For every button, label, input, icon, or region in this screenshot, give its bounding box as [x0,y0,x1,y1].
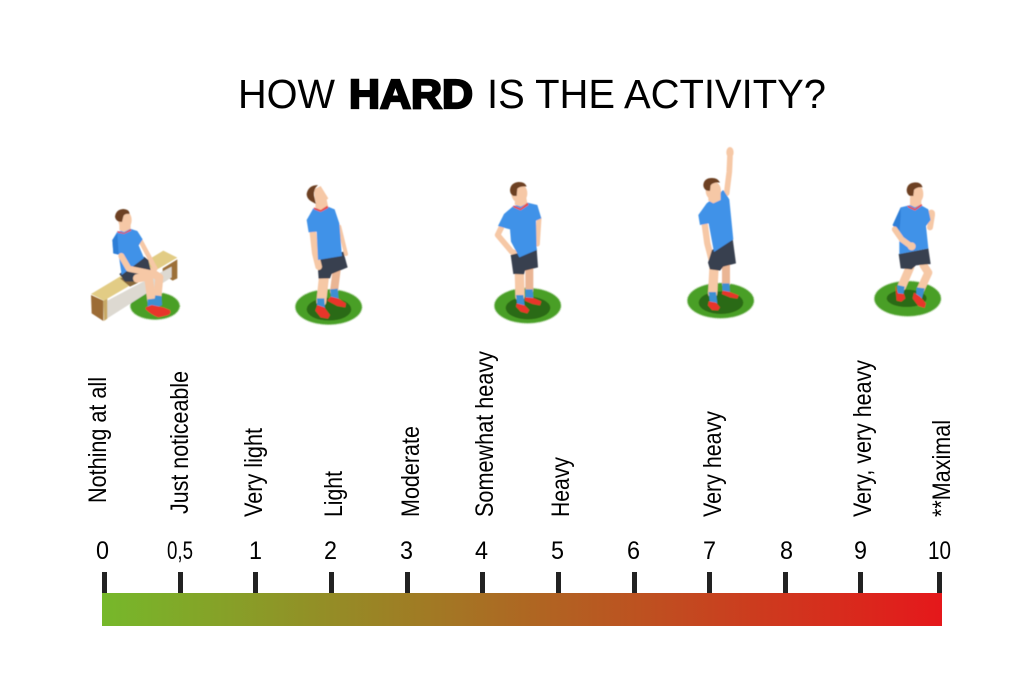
title: IS THE ACTIVITY? [487,71,826,117]
icon: man looking up [296,185,362,324]
rotated intensity labels: Very heavy [699,411,727,517]
scale numbers: 7 [703,537,716,565]
rotated intensity labels: Very light [240,428,268,517]
title [238,71,826,117]
rotated intensity labels: **Maximal [928,420,956,517]
scale numbers: 3 [400,537,413,565]
rotated intensity labels: Heavy [547,457,575,517]
rotated intensity labels [84,351,956,517]
scale numbers: 1 [249,537,262,565]
scale numbers [96,537,951,565]
title: HOW [238,71,335,117]
rotated intensity labels: Just noticeable [166,371,194,514]
rotated intensity labels: Light [320,471,348,517]
rotated intensity labels: Very, very heavy [849,360,877,517]
icon: man jogging [875,182,941,316]
scale numbers: 6 [627,537,640,565]
scale ticks [102,572,942,593]
scale numbers: 10 [928,537,951,565]
rotated intensity labels: Somewhat heavy [471,351,499,517]
scale numbers: 4 [475,537,488,565]
icon: man with hand on hip [495,182,561,323]
scale numbers: 8 [780,537,793,565]
rotated intensity labels: Moderate [397,426,425,517]
title: HARD [349,71,473,117]
icon: man raising arm [688,147,754,318]
icon: seated man on bench [91,209,179,321]
scale numbers: 0,5 [167,537,193,565]
scale numbers: 5 [551,537,564,565]
scale numbers: 9 [854,537,867,565]
scale numbers: 0 [96,537,109,565]
rotated intensity labels: Nothing at all [84,377,112,503]
scale numbers: 2 [324,537,337,565]
gradient intensity bar [102,593,942,626]
